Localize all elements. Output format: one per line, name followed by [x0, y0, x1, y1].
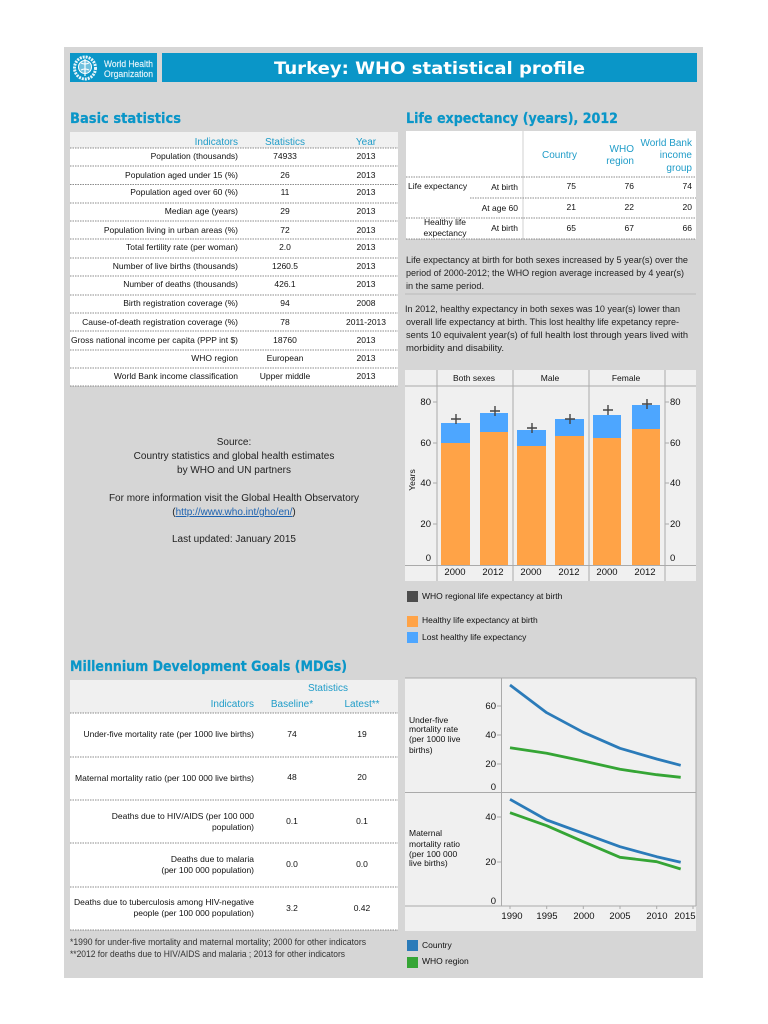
- heading: Basic statistics: Basic statistics: [70, 111, 181, 127]
- table: life expectancy: 74: [683, 181, 692, 191]
- x axis labels: 2012: [634, 567, 656, 578]
- table: MDGs: Latest**: [344, 699, 380, 710]
- heading: MDGs: Millennium Development Goals (MDGs): [70, 659, 347, 675]
- row: birth registration: 94: [280, 298, 290, 308]
- table: MDGs: Baseline*: [271, 699, 313, 710]
- row: over 60: 2013: [357, 187, 376, 197]
- table: life expectancy: [406, 131, 696, 239]
- row: WHO region: [191, 353, 376, 363]
- row: fertility: 2013: [357, 242, 376, 252]
- row: live births: 2013: [357, 261, 376, 271]
- x axis labels: 2015: [674, 911, 696, 922]
- table: life expectancy: region: [606, 156, 634, 167]
- row: World Bank classification: World Bank income classification: [114, 371, 238, 381]
- row: fertility: [126, 242, 376, 252]
- table: life expectancy: group: [666, 163, 692, 174]
- y axis right: 40: [670, 478, 681, 489]
- source note: For more information visit the Global Health Observatory: [109, 493, 359, 504]
- x axis labels: 1990: [501, 911, 523, 922]
- row: maternal mortality: 48: [287, 772, 297, 782]
- table: life expectancy: 75: [567, 181, 576, 191]
- y axis left: 60: [420, 438, 431, 449]
- x axis labels: 2012: [558, 567, 580, 578]
- row: population: Population (thousands): [151, 151, 238, 161]
- row: cause of death registration: 78: [280, 317, 290, 327]
- logo: World Health Organization: [70, 53, 157, 82]
- row: urban: Population living in urban areas (%): [104, 225, 238, 235]
- table: life expectancy: 20: [683, 202, 692, 212]
- x axis labels: 2000: [573, 911, 595, 922]
- legend: line charts: Country: [422, 940, 453, 950]
- y axis right: [670, 397, 681, 564]
- row: under-five mortality: Under-five mortality rate (per 1000 live births): [83, 729, 254, 739]
- row: cause of death registration: Cause-of-death registration coverage (%): [82, 317, 238, 327]
- source note: Country statistics and global health estimates: [134, 451, 334, 462]
- chart: maternal mortality ratio: live births): [409, 858, 448, 868]
- title banner: [162, 53, 697, 82]
- row: World Bank classification: Upper middle: [260, 371, 311, 381]
- x axis labels: 2000: [444, 567, 466, 578]
- footnotes: *1990 for under-five mortality and maternal mortality; 2000 for other indicators: [70, 937, 366, 948]
- bar chart: life expectancy by sex: Both sexes: [453, 373, 495, 383]
- chart: maternal mortality ratio: 20: [485, 857, 496, 868]
- text block: healthy expectancy: morbidity and disability.: [406, 343, 504, 354]
- table: life expectancy: 76: [625, 181, 634, 191]
- row: over 60: [130, 187, 376, 197]
- legend: line charts: WHO region: [422, 956, 469, 966]
- row: under 15: 2013: [357, 170, 376, 180]
- row: malaria: (per 100 000 population): [161, 865, 254, 875]
- table: life expectancy: At age 60: [482, 203, 518, 213]
- row: tuberculosis: Deaths due to tuberculosis among HIV-negative: [74, 897, 254, 907]
- markers: WHO regional life expectancy: [451, 399, 652, 433]
- row: under 15: 26: [280, 170, 290, 180]
- bars: lost healthy life expectancy: [441, 405, 660, 446]
- bar chart: life expectancy by sex: Female: [612, 373, 640, 383]
- bar chart: life expectancy by sex: Years: [407, 469, 417, 491]
- chart: maternal mortality ratio: [409, 799, 681, 907]
- chart: maternal mortality ratio: 0: [491, 896, 496, 907]
- text block: life expectancy trend: in the same period.: [406, 281, 484, 292]
- chart: maternal mortality ratio: Maternal: [409, 828, 442, 838]
- y axis left: 40: [420, 478, 431, 489]
- row: maternal mortality: Maternal mortality ratio (per 100 000 live births): [75, 773, 254, 783]
- table: basic statistics: Statistics: [265, 137, 305, 148]
- table: life expectancy: At birth: [491, 223, 518, 233]
- text block: life expectancy trend: [406, 255, 688, 292]
- chart: under-five mortality rate: (per 1000 live: [409, 734, 461, 744]
- row: urban: [104, 225, 376, 235]
- row: under-five mortality: 19: [357, 729, 367, 739]
- x axis labels: 2000: [596, 567, 618, 578]
- row: GNI: 18760: [273, 335, 297, 345]
- x axis labels: 1995: [536, 911, 558, 922]
- table: basic statistics: [70, 132, 398, 386]
- row: live births: [113, 261, 376, 271]
- row: GNI: 2013: [357, 335, 376, 345]
- row: malaria: 0.0: [286, 859, 298, 869]
- table: life expectancy: 22: [625, 202, 634, 212]
- table: life expectancy: 65: [567, 223, 576, 233]
- row: WHO region: 2013: [357, 353, 376, 363]
- y axis left: 80: [420, 397, 431, 408]
- footnotes: [70, 937, 366, 960]
- chart: under-five mortality rate: 20: [485, 759, 496, 770]
- row: malaria: Deaths due to malaria: [171, 854, 254, 864]
- heading: Life expectancy: Life expectancy (years), 2012: [406, 111, 618, 127]
- panel: page background: [64, 47, 703, 978]
- row: population: 2013: [357, 151, 376, 161]
- row: tuberculosis: people (per 100 000 population): [133, 908, 254, 918]
- row: urban: 72: [280, 225, 290, 235]
- row: birth registration: 2008: [357, 298, 376, 308]
- row: birth registration: Birth registration coverage (%): [123, 298, 238, 308]
- x axis labels: 2005: [609, 911, 631, 922]
- row: over 60: Population aged over 60 (%): [130, 187, 238, 197]
- title banner: Turkey: WHO statistical profile: [274, 59, 585, 79]
- table: life expectancy: 67: [625, 223, 634, 233]
- x axis labels: [444, 567, 656, 578]
- row: urban: 2013: [357, 225, 376, 235]
- chart: under-five mortality rate: Under-five: [409, 715, 448, 725]
- table: life expectancy: expectancy: [424, 228, 467, 238]
- table: life expectancy: WHO: [610, 144, 634, 155]
- table: life expectancy: Country: [542, 150, 577, 161]
- row: median age: [165, 206, 376, 216]
- row: GNI: [71, 335, 376, 345]
- text block: healthy expectancy: overall life expectancy at birth. This lost healthy life expetancy repre-: [406, 317, 679, 328]
- y axis right: 80: [670, 397, 681, 408]
- table: MDGs: Statistics: [308, 683, 348, 694]
- legend: bar chart: [407, 591, 563, 643]
- y axis left: 20: [420, 519, 431, 530]
- row: HIV/AIDS: [112, 811, 368, 832]
- table: basic statistics: Year: [356, 137, 377, 148]
- text block: life expectancy trend: Life expectancy at birth for both sexes increased by 5 year(s) over the: [406, 255, 688, 266]
- source note: (http://www.who.int/gho/en/): [172, 507, 296, 518]
- row: fertility: Total fertility rate (per woman): [126, 242, 238, 252]
- source note: Source:: [217, 437, 251, 448]
- row: HIV/AIDS: Deaths due to HIV/AIDS (per 100 000: [112, 811, 254, 821]
- row: deaths: [123, 279, 376, 289]
- table: MDGs: Indicators: [211, 699, 254, 710]
- y axis left: 0: [426, 553, 431, 564]
- y axis right: 20: [670, 519, 681, 530]
- chart: under-five mortality rate: births): [409, 745, 433, 755]
- row: birth registration: [123, 298, 376, 308]
- chart: maternal mortality ratio: mortality ratio: [409, 839, 460, 849]
- table: basic statistics: Indicators: [195, 137, 238, 148]
- x axis labels: 2000: [520, 567, 542, 578]
- row: deaths: 2013: [357, 279, 376, 289]
- row: under-five mortality: [83, 729, 367, 739]
- legend: bar chart: Lost healthy life expectancy: [422, 632, 527, 642]
- row: maternal mortality: [75, 772, 367, 783]
- row: fertility: 2.0: [279, 242, 291, 252]
- chart: under-five mortality rate: mortality rate: [409, 724, 458, 734]
- legend: line charts: [407, 940, 469, 968]
- row: under 15: Population aged under 15 (%): [125, 170, 238, 180]
- row: live births: Number of live births (thousands): [113, 261, 238, 271]
- table: life expectancy: 21: [567, 202, 576, 212]
- row: tuberculosis: 0.42: [354, 903, 371, 913]
- row: median age: 29: [280, 206, 290, 216]
- row: maternal mortality: 20: [357, 772, 367, 782]
- row: HIV/AIDS: 0.1: [356, 816, 368, 826]
- row: population: [151, 151, 376, 161]
- row: cause of death registration: 2011-2013: [346, 317, 386, 327]
- table: life expectancy: Life expectancy: [408, 181, 468, 191]
- text block: life expectancy trend: period of 2000-2012; the WHO region average increased by 4 year(s): [406, 268, 684, 279]
- table: life expectancy: income: [660, 150, 692, 161]
- row: HIV/AIDS: population): [212, 822, 254, 832]
- source note: [109, 437, 359, 545]
- footnotes: **2012 for deaths due to HIV/AIDS and malaria ; 2013 for other indicators: [70, 949, 345, 960]
- table: life expectancy: World Bank: [640, 138, 693, 149]
- chart: under-five mortality rate: 40: [485, 730, 496, 741]
- row: population: 74933: [273, 151, 297, 161]
- row: World Bank classification: 2013: [357, 371, 376, 381]
- row: cause of death registration: [82, 317, 386, 327]
- y axis left: [420, 397, 431, 564]
- row: over 60: 11: [281, 187, 290, 197]
- source note: by WHO and UN partners: [177, 465, 291, 476]
- logo: World Health Organization: Organization: [104, 69, 153, 79]
- chart: maternal mortality ratio: 40: [485, 812, 496, 823]
- bar chart: life expectancy by sex: [405, 370, 696, 581]
- row: live births: 1260.5: [272, 261, 298, 271]
- row: WHO region: WHO region: [191, 353, 238, 363]
- chart: under-five mortality rate: 60: [485, 701, 496, 712]
- text block: healthy expectancy: In 2012, healthy expectancy in both sexes was 10 year(s) lower than: [405, 304, 680, 315]
- bar chart: life expectancy by sex: Male: [541, 373, 559, 383]
- legend: bar chart: WHO regional life expectancy at birth: [422, 591, 563, 601]
- row: deaths: 426.1: [274, 279, 296, 289]
- row: malaria: 0.0: [356, 859, 368, 869]
- table: life expectancy: At birth: [491, 182, 518, 192]
- chart: under-five mortality rate: [409, 685, 681, 793]
- x axis labels: 2012: [482, 567, 504, 578]
- row: median age: Median age (years): [165, 206, 238, 216]
- row: tuberculosis: 3.2: [286, 903, 298, 913]
- x axis labels: [501, 911, 696, 922]
- row: under 15: [125, 170, 376, 180]
- row: World Bank classification: [114, 371, 376, 381]
- chart: maternal mortality ratio: (per 100 000: [409, 849, 457, 859]
- table: life expectancy: Healthy life: [424, 217, 466, 227]
- source note: Last updated: January 2015: [172, 534, 296, 545]
- row: deaths: Number of deaths (thousands): [123, 279, 238, 289]
- table: MDGs: [70, 680, 398, 930]
- bars: healthy life expectancy: [441, 429, 660, 565]
- y axis right: 0: [670, 553, 675, 564]
- row: WHO region: European: [267, 353, 304, 363]
- row: median age: 2013: [357, 206, 376, 216]
- text block: healthy expectancy: sents 10 equivalent year(s) of full health lost through years lived with: [406, 330, 688, 341]
- y axis right: 60: [670, 438, 681, 449]
- row: HIV/AIDS: 0.1: [286, 816, 298, 826]
- chart: under-five mortality rate: 0: [491, 782, 496, 793]
- table: life expectancy: 66: [683, 223, 692, 233]
- row: tuberculosis: [74, 897, 371, 918]
- row: malaria: [161, 854, 368, 875]
- x axis labels: 2010: [646, 911, 668, 922]
- legend: bar chart: Healthy life expectancy at birth: [422, 615, 538, 625]
- row: under-five mortality: 74: [287, 729, 297, 739]
- line charts: mortality trends: [405, 678, 696, 931]
- row: GNI: Gross national income per capita (PPP int $): [71, 335, 238, 345]
- logo: World Health Organization: World Health: [104, 59, 153, 69]
- text block: healthy expectancy: [405, 304, 688, 354]
